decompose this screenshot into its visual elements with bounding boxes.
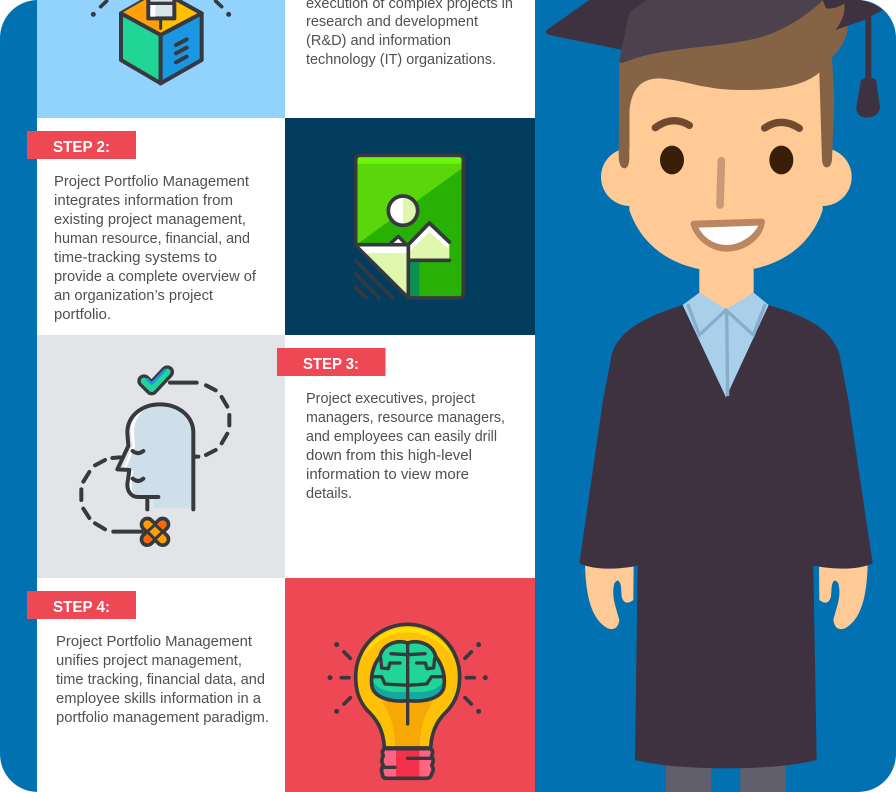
panel: step 3 text bbox=[285, 335, 535, 578]
panel: step 2 icon bbox=[285, 118, 535, 335]
step 2 label: STEP 2: bbox=[53, 139, 110, 156]
gown bbox=[579, 305, 873, 768]
panel: step 1 text: (R&D) and information bbox=[306, 33, 451, 49]
icon: light bulb with brain bbox=[330, 624, 485, 778]
panel: step 3 text: and employees can easily drill bbox=[306, 429, 497, 445]
tassel bbox=[856, 17, 880, 118]
panel: step 3 text: Project executives, project bbox=[306, 391, 475, 407]
panel: step 3 text: information to view more bbox=[306, 467, 469, 483]
smile bbox=[690, 219, 765, 252]
eyebrows bbox=[655, 121, 799, 128]
hands bbox=[585, 563, 868, 629]
panel: step 4 text bbox=[37, 578, 285, 792]
shirt collar bbox=[683, 293, 769, 397]
neck bbox=[699, 263, 754, 310]
icon: picture document bbox=[356, 155, 463, 298]
graduate character bbox=[546, 0, 883, 792]
step 4 label: STEP 4: bbox=[53, 599, 110, 616]
panel: step 4 text: Project Portfolio Management bbox=[56, 634, 252, 650]
panel: step 1 icon bbox=[37, 0, 285, 118]
hair bbox=[619, 0, 848, 168]
nose bbox=[720, 161, 721, 205]
cap brim left bbox=[546, 0, 646, 50]
step 2 label bbox=[27, 131, 136, 159]
panel: step 2 text: portfolio. bbox=[54, 307, 111, 323]
panel: step 2 text: provide a complete overview of bbox=[54, 269, 257, 285]
panel: step 3 text: down from this high-level bbox=[306, 448, 472, 464]
panel: step 2 text: human resource, financial, and bbox=[54, 231, 250, 247]
panel: step 2 text: an organization’s project bbox=[54, 288, 213, 304]
panel: step 2 text: Project Portfolio Management bbox=[54, 174, 249, 190]
step 3 label: STEP 3: bbox=[303, 356, 359, 373]
panel: step 4 text: portfolio management paradigm. bbox=[56, 710, 269, 726]
cap front bbox=[619, 0, 823, 63]
face bbox=[629, 67, 823, 272]
panel: step 3 icon bbox=[37, 335, 285, 578]
panel: step 4 icon bbox=[285, 578, 535, 792]
panel: step 1 text: research and development bbox=[306, 14, 478, 30]
icon: head with check and bandage bbox=[81, 370, 229, 539]
panel: step 2 text: existing project management, bbox=[54, 212, 246, 228]
step 3 label bbox=[277, 348, 386, 376]
eyes bbox=[660, 146, 793, 174]
panel: step 2 text: time-tracking systems to bbox=[54, 250, 217, 266]
panel: step 3 text: details. bbox=[306, 486, 352, 502]
panel: step 4 text: time tracking, financial data, and bbox=[56, 672, 265, 688]
panel: step 2 text: integrates information from bbox=[54, 193, 233, 209]
ears bbox=[601, 148, 852, 206]
panel: step 3 text: managers, resource managers, bbox=[306, 410, 505, 426]
trouser legs bbox=[666, 760, 786, 792]
panel: step 2 text bbox=[37, 118, 285, 335]
cap brim right bbox=[823, 0, 883, 30]
panel: step 4 text: unifies project management, bbox=[56, 653, 242, 669]
panel: step 4 text: employee skills information in a bbox=[56, 691, 262, 707]
panel: step 1 text bbox=[285, 0, 535, 118]
icon: open box bbox=[92, 0, 230, 83]
step 4 label bbox=[27, 591, 136, 619]
panel: step 1 text: technology (IT) organizations. bbox=[306, 52, 496, 68]
